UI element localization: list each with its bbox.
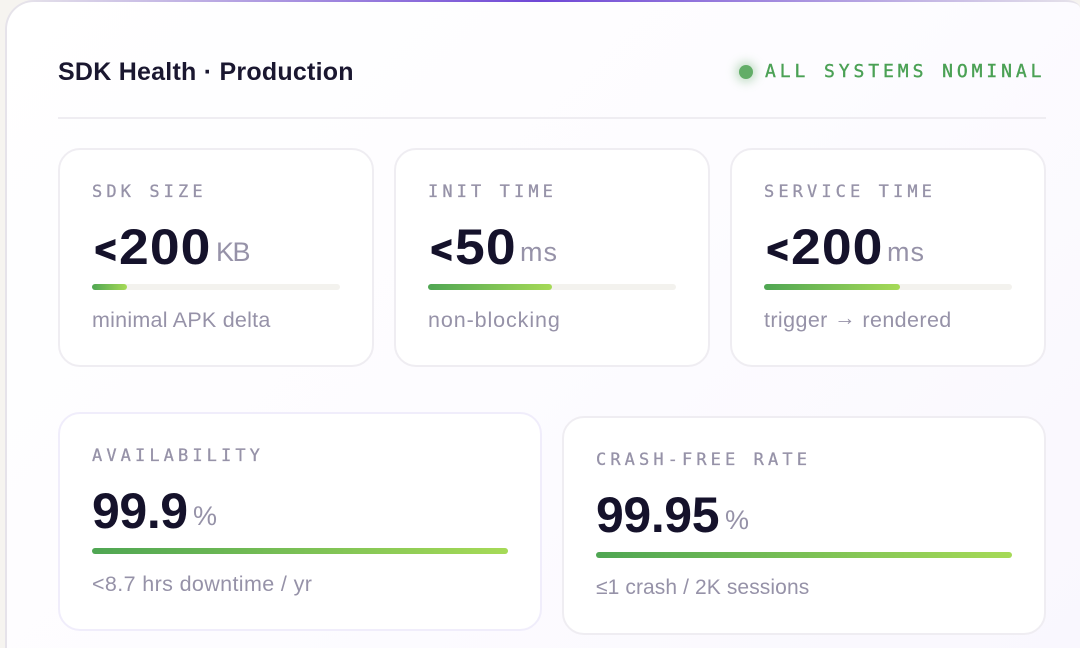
card: init time	[394, 148, 710, 367]
value: ms	[520, 237, 558, 267]
value	[767, 219, 925, 275]
value: KB	[216, 237, 249, 267]
progress bar	[428, 284, 676, 290]
label: SDK SIZE	[92, 182, 207, 202]
caption: minimal APK delta	[92, 308, 271, 332]
progress bar	[92, 284, 340, 290]
value	[431, 219, 558, 275]
label: INIT TIME	[428, 182, 557, 202]
value	[95, 219, 250, 275]
top accent gradient bar	[0, 0, 1080, 2]
card: availability	[58, 412, 542, 631]
value: 99.9	[92, 483, 188, 539]
card: crash-free rate	[562, 416, 1046, 635]
value: 200	[791, 219, 883, 275]
value: %	[725, 505, 749, 535]
header divider	[58, 117, 1046, 119]
progress bar	[596, 552, 1012, 558]
caption: ≤1 crash / 2K sessions	[596, 576, 809, 599]
card: service time	[730, 148, 1046, 367]
status text: ALL SYSTEMS NOMINAL	[765, 61, 1045, 82]
value: 50	[455, 219, 517, 275]
title: SDK Health · Production	[58, 58, 354, 86]
progress bar	[764, 284, 1012, 290]
value: 99.95	[596, 487, 719, 543]
value: 200	[119, 219, 211, 275]
caption: <8.7 hrs downtime / yr	[92, 572, 312, 596]
value: ms	[887, 237, 925, 267]
progress bar	[92, 548, 508, 554]
value: %	[193, 501, 217, 531]
icon: green status dot	[739, 65, 753, 79]
status indicator	[732, 58, 1045, 86]
value: <	[767, 229, 788, 270]
caption: non-blocking	[428, 308, 561, 332]
label: SERVICE TIME	[764, 182, 936, 202]
caption: trigger → rendered	[764, 306, 952, 332]
value: <	[95, 229, 116, 270]
value: <	[431, 229, 452, 270]
card: SDK size	[58, 148, 374, 367]
label: CRASH-FREE RATE	[596, 450, 811, 470]
label: AVAILABILITY	[92, 446, 264, 466]
